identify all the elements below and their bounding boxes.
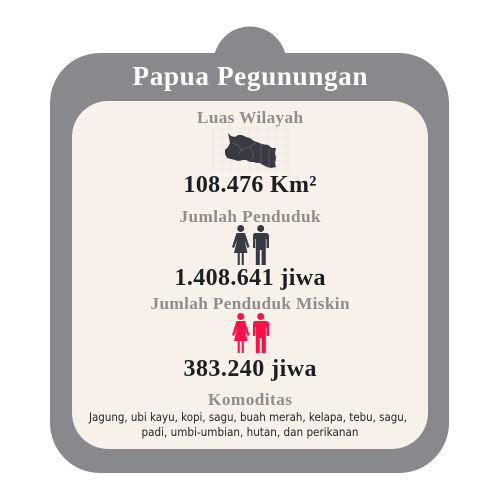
heading: Jumlah Penduduk: Jumlah Penduduk	[180, 207, 321, 226]
icon: map of Papua Pegunungan	[212, 128, 289, 172]
text: commodities list: padi, umbi-umbian, hutan, dan perikanan	[142, 425, 358, 439]
heading: Komoditas: Komoditas	[208, 390, 292, 409]
number: area: 108.476 Km²	[184, 172, 316, 198]
icon: red woman and man	[232, 313, 269, 353]
heading: Luas Wilayah: Luas Wilayah	[197, 108, 303, 127]
text: commodities list	[88, 410, 407, 439]
number: poor population: 383.240 jiwa	[184, 356, 316, 382]
icon: man	[253, 313, 269, 353]
icon: man	[253, 225, 269, 265]
icon: dark woman and man	[232, 225, 269, 265]
icon: woman	[232, 313, 250, 353]
title: Papua Pegunungan	[132, 61, 368, 91]
number: population: 1.408.641 jiwa	[174, 265, 326, 291]
panel: outer gray card	[50, 26, 449, 473]
heading: Jumlah Penduduk Miskin: Jumlah Penduduk Miskin	[150, 294, 350, 313]
icon: woman	[232, 225, 250, 265]
text: commodities list: Jagung, ubi kayu, kopi, sagu, buah merah, kelapa, tebu, sagu,	[88, 410, 407, 424]
panel: inner cream card	[72, 101, 428, 449]
